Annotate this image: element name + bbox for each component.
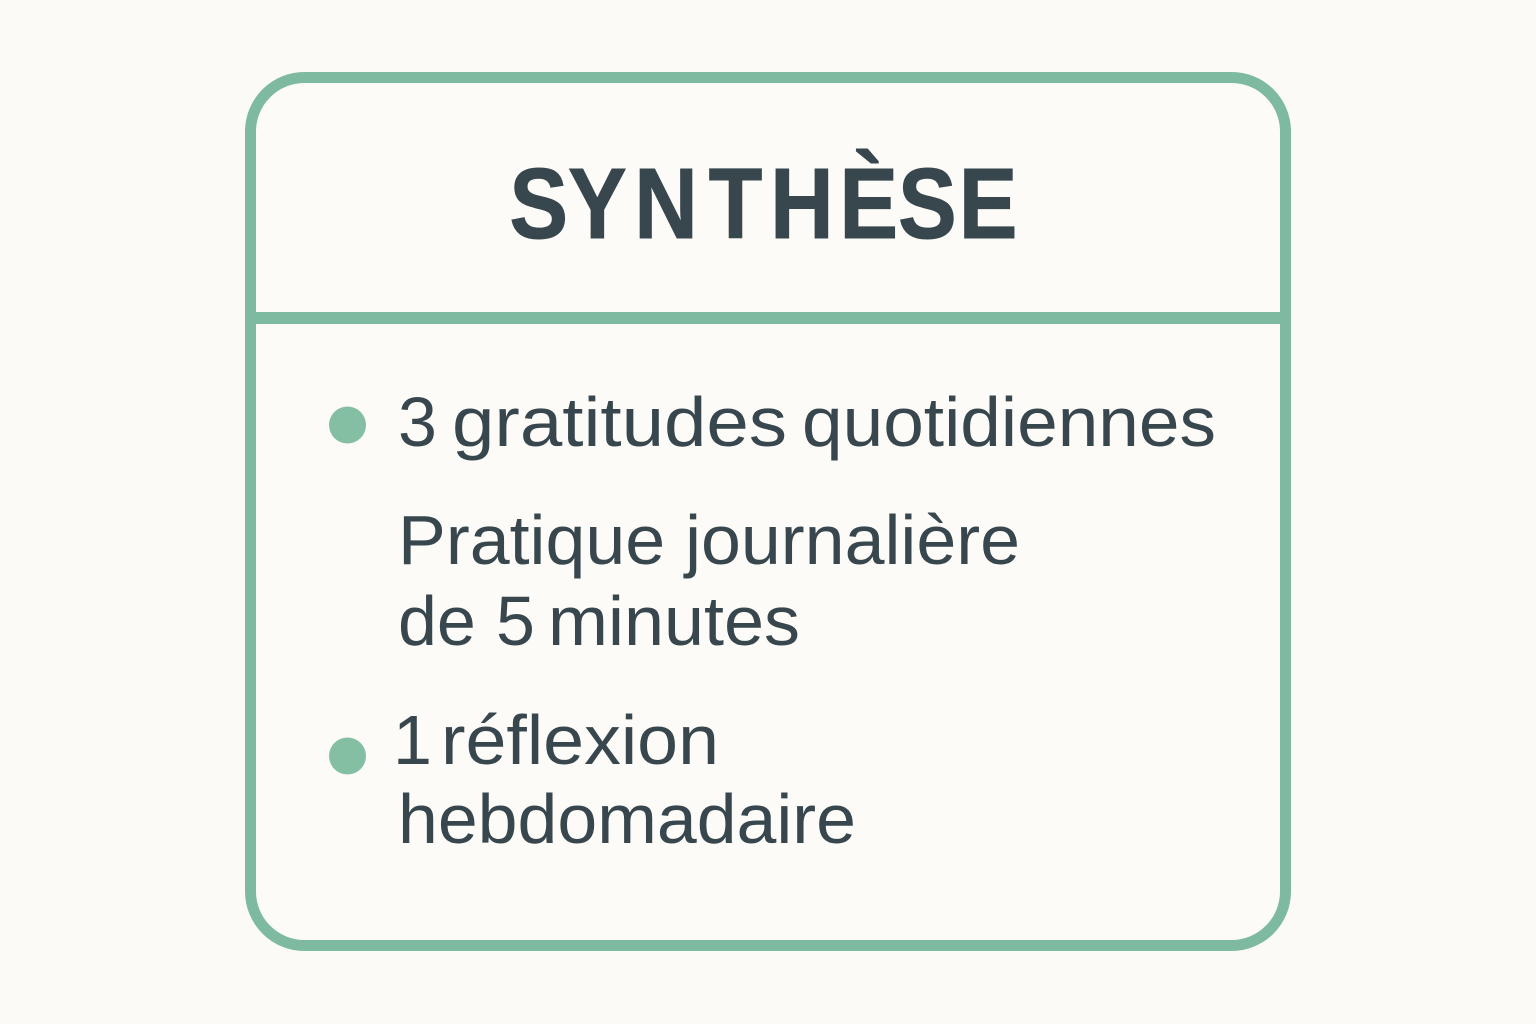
text block: pratique journalière: Pratique journalière — [398, 501, 1020, 579]
text block: pratique journalière: 5 — [496, 582, 535, 660]
bullet: réflexion hebdomadaire: réflexion — [441, 701, 719, 779]
text block: pratique journalière: minutes — [548, 582, 800, 660]
bullet: gratitudes: 3 — [398, 383, 437, 461]
title: SYNTHÈSE — [509, 148, 1017, 259]
bullet: réflexion hebdomadaire: 1 — [393, 701, 432, 779]
bullet: réflexion hebdomadaire — [329, 701, 856, 858]
bullet: gratitudes — [329, 383, 1216, 461]
bullet: gratitudes: quotidiennes — [802, 383, 1216, 461]
bullet: réflexion hebdomadaire: hebdomadaire — [398, 780, 856, 858]
panel: synthèse card — [250, 78, 1286, 946]
text block: pratique journalière: de — [398, 582, 476, 660]
text block: pratique journalière — [398, 501, 1020, 660]
bullet: gratitudes: gratitudes — [452, 383, 787, 461]
